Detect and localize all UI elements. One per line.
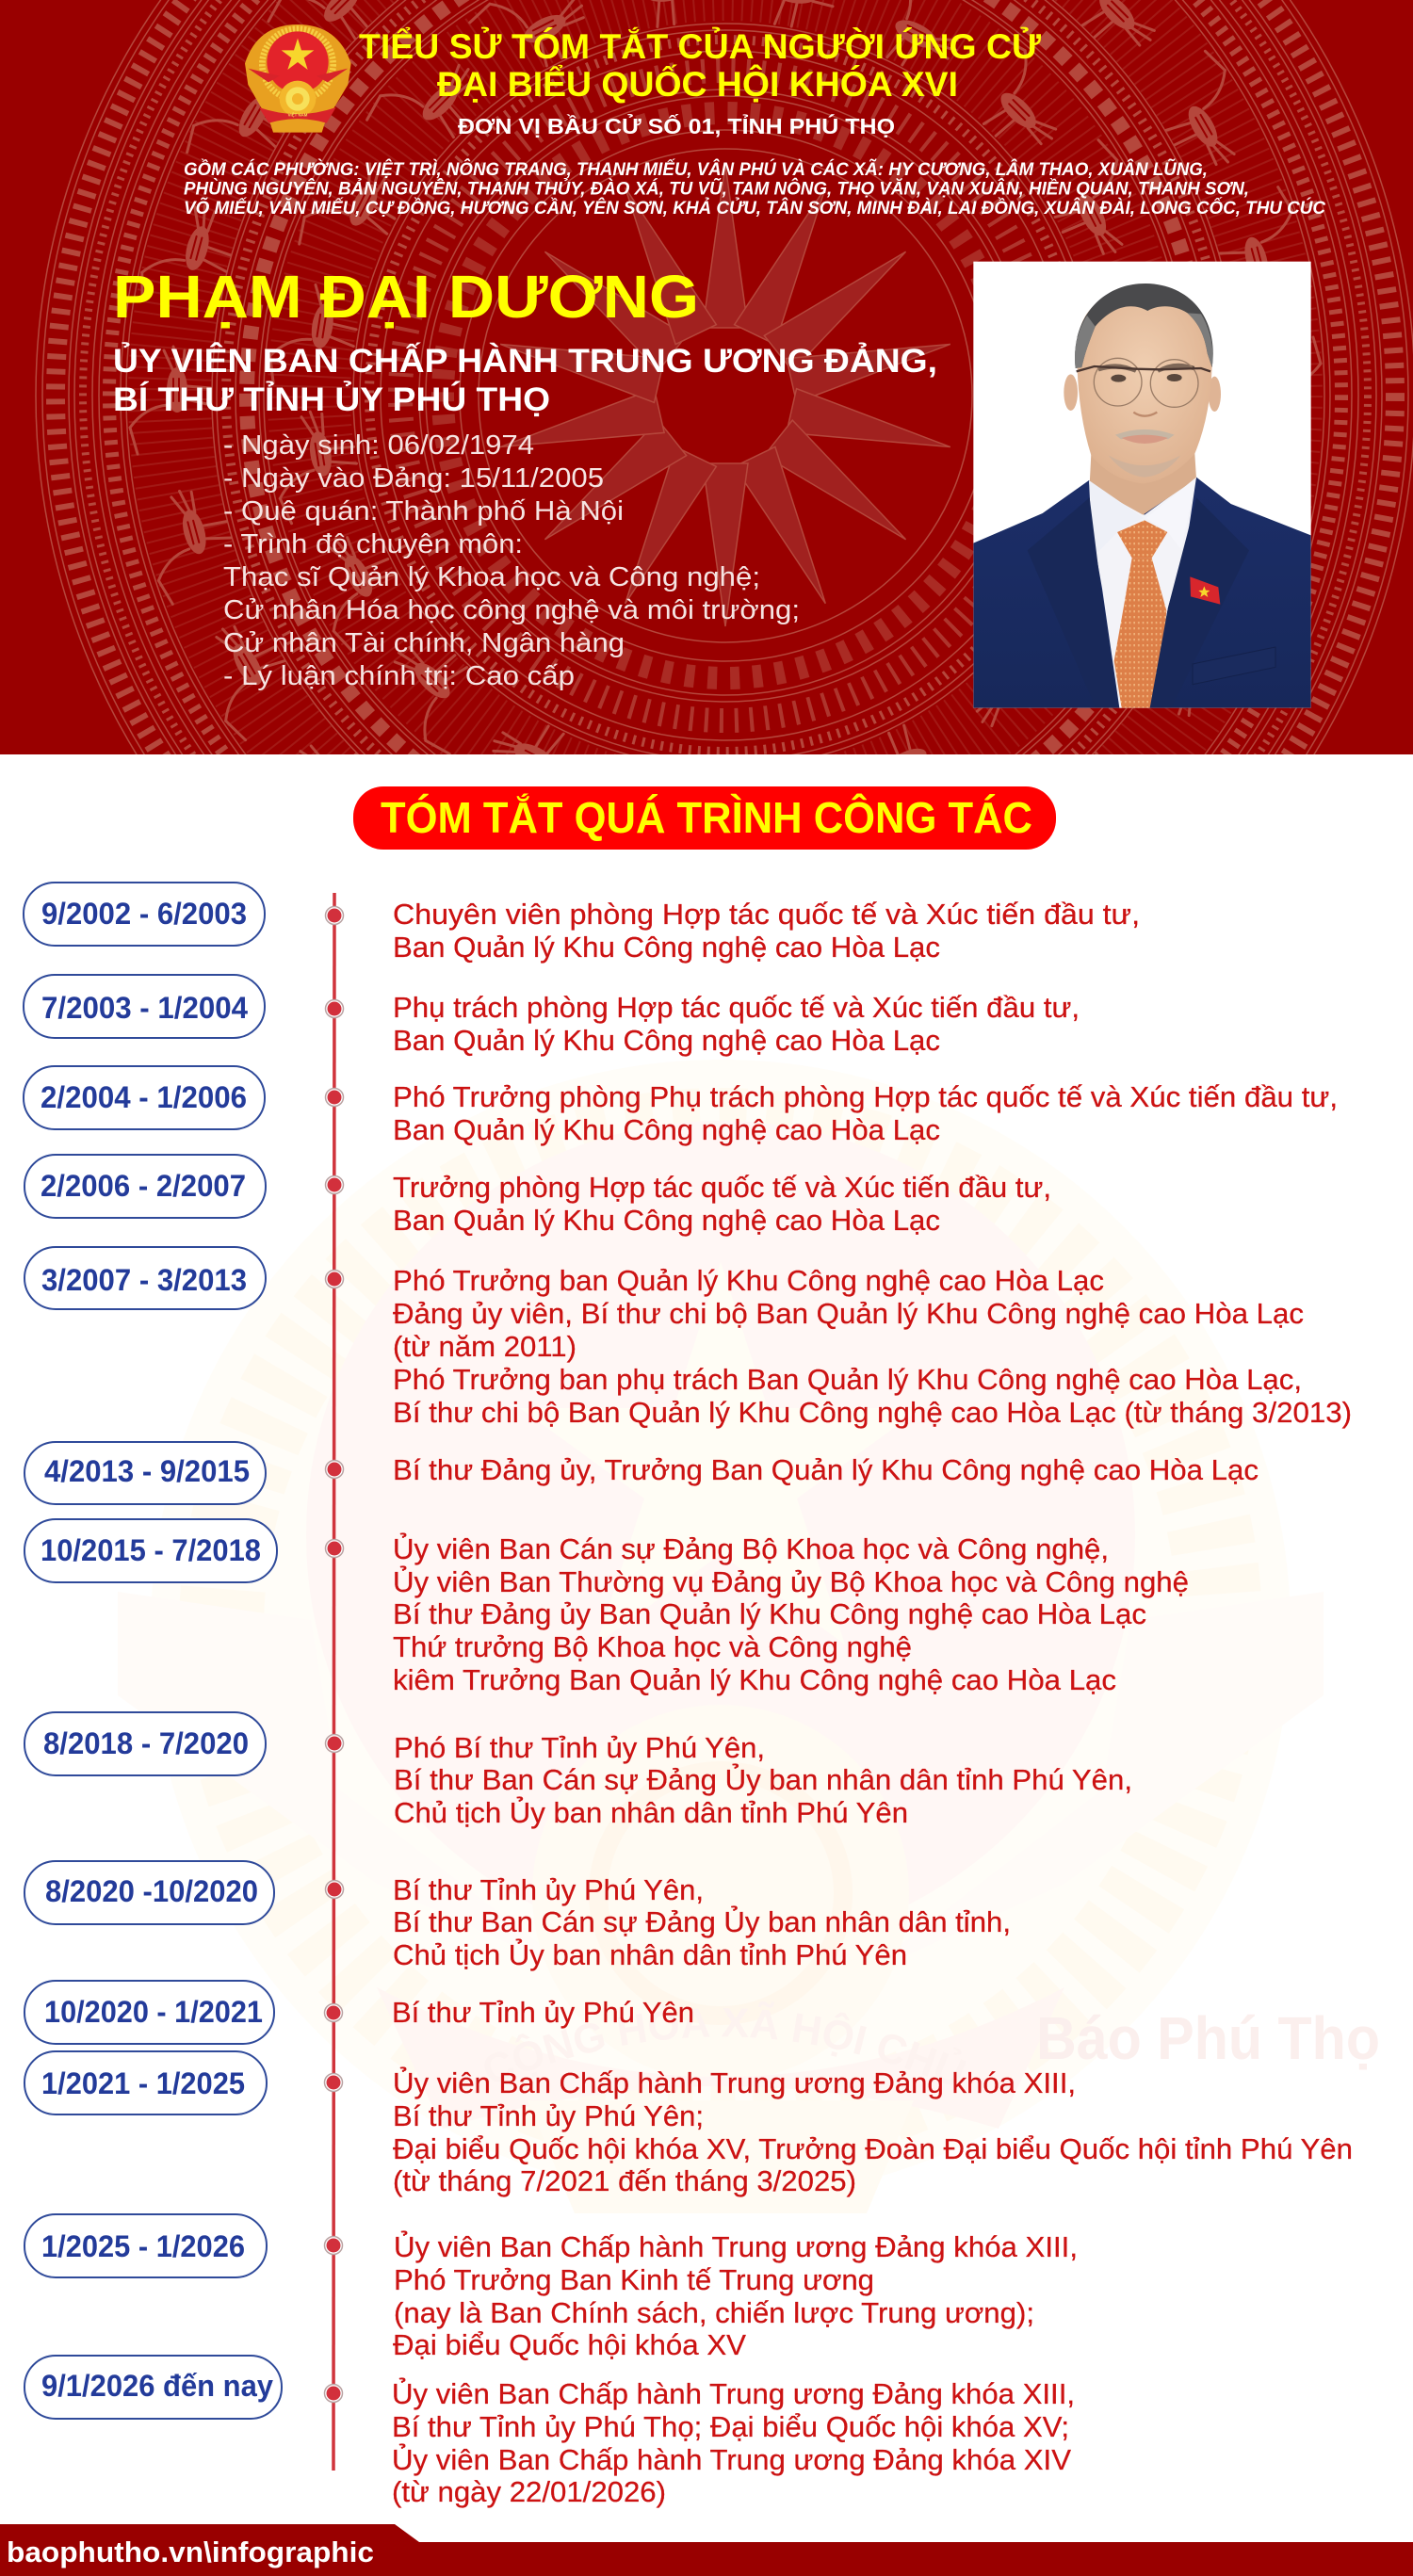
description	[393, 1080, 1338, 1146]
description: Ban Quản lý Khu Công nghệ cao Hòa Lạc	[393, 1204, 940, 1237]
description: Phó Trưởng ban Quản lý Khu Công nghệ cao Hòa Lạc	[393, 1264, 1104, 1297]
description: Bí thư Đảng ủy Ban Quản lý Khu Công nghệ cao Hòa Lạc	[393, 1597, 1146, 1630]
description: Phó Trưởng ban phụ trách Ban Quản lý Khu Công nghệ cao Hòa Lạc,	[393, 1363, 1302, 1396]
marker	[326, 1270, 343, 1288]
timeline entry: 10/2015 - 7/2018	[24, 1519, 1189, 1696]
biography details: - Quê quán: Thành phố Hà Nội	[223, 496, 624, 527]
description: Đảng ủy viên, Bí thư chi bộ Ban Quản lý Khu Công nghệ cao Hòa Lạc	[393, 1297, 1304, 1330]
marker	[326, 1539, 343, 1558]
date pill	[24, 975, 265, 1038]
timeline entry: 2/2004 - 1/2006	[24, 1066, 1338, 1146]
pattern: middle animal band	[266, 0, 1185, 855]
pattern: outer animal band	[128, 0, 1323, 754]
watermark: publisher name: Báo Phú Thọ	[1036, 2004, 1380, 2072]
date pill	[24, 883, 265, 946]
description: Thứ trưởng Bộ Khoa học và Công nghệ	[393, 1630, 912, 1663]
date pill: 10/2015 - 7/2018	[41, 1533, 261, 1567]
bronze drum pattern	[35, 0, 1413, 754]
description: Bí thư Tỉnh ủy Phú Yên,	[393, 1873, 704, 1906]
candidate role: ỦY VIÊN BAN CHẤP HÀNH TRUNG ƯƠNG ĐẢNG,	[113, 342, 937, 380]
date pill	[24, 2051, 267, 2114]
description	[393, 2066, 1353, 2197]
description: (từ ngày 22/01/2026)	[392, 2475, 666, 2508]
marker	[326, 1089, 343, 1106]
description	[394, 1731, 1132, 1829]
timeline entry: 4/2013 - 9/2015	[24, 1442, 1259, 1504]
date pill: 2/2004 - 1/2006	[41, 1080, 247, 1114]
candidate role	[113, 342, 937, 418]
title: ĐẠI BIỂU QUỐC HỘI KHÓA XVI	[437, 64, 958, 104]
description: Bí thư Ban Cán sự Đảng Ủy ban nhân dân tỉnh Phú Yên,	[394, 1762, 1132, 1796]
date pill: 4/2013 - 9/2015	[44, 1454, 250, 1488]
timeline entry: 3/2007 - 3/2013	[24, 1247, 1352, 1429]
description	[393, 898, 1140, 964]
date pill: 8/2018 - 7/2020	[43, 1726, 249, 1760]
description: Ủy viên Ban Chấp hành Trung ương Đảng khóa XIII,	[392, 2376, 1075, 2410]
timeline entry: 1/2025 - 1/2026	[24, 2214, 1078, 2361]
description: Bí thư Đảng ủy, Trưởng Ban Quản lý Khu Công nghệ cao Hòa Lạc	[393, 1453, 1259, 1486]
biography details	[223, 430, 800, 691]
description: Phó Bí thư Tỉnh ủy Phú Yên,	[394, 1731, 765, 1764]
timeline entry: 2/2006 - 2/2007	[24, 1155, 1051, 1237]
description: Đại biểu Quốc hội khóa XV, Trưởng Đoàn Đại biểu Quốc hội tỉnh Phú Yên	[393, 2132, 1353, 2165]
description: Ban Quản lý Khu Công nghệ cao Hòa Lạc	[393, 931, 940, 964]
description: Phó Trưởng Ban Kinh tế Trung ương	[394, 2263, 874, 2296]
date pill	[24, 1981, 274, 2044]
timeline entry: 8/2018 - 7/2020	[24, 1712, 1132, 1829]
title	[359, 26, 1041, 104]
portrait photo	[973, 262, 1311, 708]
description: Bí thư Tỉnh ủy Phú Yên	[392, 1996, 694, 2029]
description: Chủ tịch Ủy ban nhân dân tỉnh Phú Yên	[394, 1795, 908, 1829]
biography details: - Ngày sinh: 06/02/1974	[223, 430, 534, 461]
footer bar	[0, 2524, 1413, 2576]
date pill	[24, 1442, 266, 1504]
date pill: 8/2020 -10/2020	[45, 1874, 258, 1908]
description: Ủy viên Ban Cán sự Đảng Bộ Khoa học và Công nghệ,	[393, 1531, 1109, 1565]
description	[393, 1531, 1189, 1696]
marker	[326, 1880, 343, 1899]
description: Ủy viên Ban Chấp hành Trung ương Đảng khóa XIII,	[393, 2066, 1076, 2099]
marker	[326, 906, 343, 925]
description	[393, 1264, 1352, 1429]
description: (từ tháng 7/2021 đến tháng 3/2025)	[393, 2164, 856, 2197]
description: (nay là Ban Chính sách, chiến lược Trung ương);	[394, 2296, 1034, 2329]
marker	[326, 1175, 343, 1194]
description: Chủ tịch Ủy ban nhân dân tỉnh Phú Yên	[393, 1937, 907, 1971]
marker	[324, 2074, 343, 2091]
timeline entry: 7/2003 - 1/2004	[24, 975, 1080, 1057]
date pill	[24, 1861, 274, 1924]
description: Ủy viên Ban Thường vụ Đảng ủy Bộ Khoa học và Công nghệ	[393, 1564, 1189, 1598]
description: Ủy viên Ban Chấp hành Trung ương Đảng khóa XIV	[392, 2442, 1071, 2476]
marker	[326, 1460, 343, 1479]
date pill: 10/2020 - 1/2021	[44, 1995, 263, 2029]
description	[392, 2376, 1075, 2508]
text block: wards and communes: GỒM CÁC PHƯỜNG: VIỆT TRÌ, NÔNG TRANG, THANH MIẾU, VÂN PHÚ VÀ CÁC XÃ: HY CƯƠNG, LÂM THAO, XUÂN LŨNG,	[184, 159, 1208, 180]
subtitle: constituency: ĐƠN VỊ BẦU CỬ SỐ 01, TỈNH PHÚ THỌ	[458, 112, 895, 138]
date pill: 3/2007 - 3/2013	[41, 1263, 247, 1297]
date pill: 9/2002 - 6/2003	[41, 897, 247, 931]
description: Bí thư Tỉnh ủy Phú Thọ; Đại biểu Quốc hội khóa XV;	[392, 2410, 1069, 2443]
text block: wards and communes	[184, 159, 1325, 219]
description: Bí thư Tỉnh ủy Phú Yên;	[393, 2099, 704, 2132]
description: (từ năm 2011)	[393, 1330, 577, 1363]
date pill: 2/2006 - 2/2007	[41, 1169, 246, 1203]
biography details: Thạc sĩ Quản lý Khoa học và Công nghệ;	[223, 562, 760, 592]
marker	[324, 2004, 343, 2021]
date pill: 1/2025 - 1/2026	[41, 2229, 245, 2263]
text block: wards and communes: VÕ MIẾU, VĂN MIẾU, CỰ ĐỒNG, HƯƠNG CẦN, YÊN SƠN, KHẢ CỬU, TÂN SƠN, MINH ĐÀI, LAI ĐỒNG, XUÂN ĐÀI, LONG CỐC, THU CÚC	[184, 198, 1325, 219]
date pill	[24, 1155, 266, 1218]
timeline entry: 9/2002 - 6/2003	[24, 883, 1140, 964]
biography details: - Ngày vào Đảng: 15/11/2005	[223, 463, 604, 494]
timeline entry: 10/2020 - 1/2021	[24, 1981, 694, 2044]
date pill	[24, 1247, 266, 1309]
timeline entry: 9/1/2026 đến nay	[24, 2356, 1075, 2508]
marker	[326, 1735, 343, 1752]
candidate name: PHẠM ĐẠI DƯƠNG	[113, 263, 699, 331]
date pill: 7/2003 - 1/2004	[41, 991, 248, 1025]
description	[393, 991, 1080, 1057]
marker	[326, 1000, 343, 1017]
description: Phụ trách phòng Hợp tác quốc tế và Xúc tiến đầu tư,	[393, 991, 1080, 1024]
description: Ủy viên Ban Chấp hành Trung ương Đảng khóa XIII,	[394, 2229, 1078, 2263]
date pill	[24, 2214, 267, 2277]
description: kiêm Trưởng Ban Quản lý Khu Công nghệ cao Hòa Lạc	[393, 1663, 1116, 1696]
date pill	[24, 1066, 265, 1129]
description	[393, 2229, 1078, 2361]
description: Phó Trưởng phòng Phụ trách phòng Hợp tác quốc tế và Xúc tiến đầu tư,	[393, 1080, 1338, 1113]
icon: national emblem: VIỆT NAM	[288, 112, 308, 117]
date pill	[24, 1712, 266, 1775]
timeline entry: 1/2021 - 1/2025	[24, 2051, 1353, 2197]
biography details: Cử nhân Hóa học công nghệ và môi trường;	[223, 595, 800, 625]
biography details: - Lý luận chính trị: Cao cấp	[223, 661, 575, 691]
pattern: central star	[495, 165, 955, 626]
description: Chuyên viên phòng Hợp tác quốc tế và Xúc tiến đầu tư,	[393, 898, 1140, 931]
description: Bí thư Ban Cán sự Đảng Ủy ban nhân dân tỉnh,	[393, 1904, 1011, 1938]
timeline entry: 8/2020 - 10/2020	[24, 1861, 1011, 1971]
marker	[324, 2236, 343, 2255]
text block: wards and communes: PHÙNG NGUYÊN, BẢN NGUYÊN, THANH THỦY, ĐÀO XÁ, TU VŨ, TAM NÔNG, THỌ VĂN, VẠN XUÂN, HIỀN QUAN, THANH SƠN,	[184, 179, 1249, 200]
date pill: 9/1/2026 đến nay	[41, 2369, 273, 2403]
date pill	[24, 2356, 282, 2419]
biography details: Cử nhân Tài chính, Ngân hàng	[223, 628, 625, 658]
date pill: 1/2021 - 1/2025	[41, 2066, 245, 2100]
description: Bí thư chi bộ Ban Quản lý Khu Công nghệ cao Hòa Lạc (từ tháng 3/2013)	[393, 1396, 1352, 1429]
description	[393, 1873, 1011, 1971]
description: Ban Quản lý Khu Công nghệ cao Hòa Lạc	[393, 1113, 940, 1146]
heading banner: work history: TÓM TẮT QUÁ TRÌNH CÔNG TÁC	[381, 793, 1032, 842]
biography details: - Trình độ chuyên môn:	[223, 529, 523, 559]
footer source text: baophutho.vn\infographic	[7, 2535, 374, 2568]
icon: national emblem	[245, 24, 351, 133]
date pill	[24, 1519, 277, 1582]
description: Ban Quản lý Khu Công nghệ cao Hòa Lạc	[393, 1024, 940, 1057]
candidate role: BÍ THƯ TỈNH ỦY PHÚ THỌ	[113, 381, 550, 418]
marker	[324, 2385, 343, 2402]
panel: red header	[0, 0, 1413, 754]
description	[393, 1171, 1051, 1237]
timeline axis	[333, 893, 334, 2471]
description: Trưởng phòng Hợp tác quốc tế và Xúc tiến đầu tư,	[393, 1171, 1051, 1204]
description: Đại biểu Quốc hội khóa XV	[393, 2328, 746, 2361]
title: TIỂU SỬ TÓM TẮT CỦA NGƯỜI ỨNG CỬ	[359, 26, 1041, 66]
